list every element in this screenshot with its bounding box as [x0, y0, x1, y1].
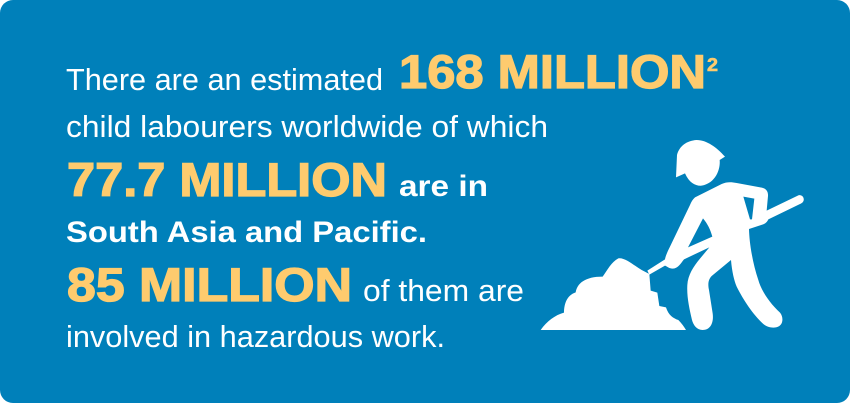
line: are in: are in — [399, 170, 488, 203]
icon: worker with shovel — [541, 140, 804, 330]
stat: 77.7 million: 77.7 MILLION — [67, 153, 387, 206]
footnote marker: 2 — [707, 55, 718, 75]
helmet and head — [676, 140, 725, 186]
line: child labourers: child labourers worldwide of which — [66, 109, 548, 144]
dirt pile — [541, 258, 686, 330]
line: region: South Asia and Pacific. — [66, 216, 427, 249]
body, arms and legs — [647, 182, 804, 330]
line: of them are: of them are — [363, 273, 524, 308]
stat: 85 million: 85 MILLION — [67, 258, 352, 311]
line: estimated intro: There are an estimated — [66, 62, 383, 97]
text block: statistics — [66, 45, 718, 354]
line: hazardous work: involved in hazardous work. — [66, 319, 445, 354]
stat: 168 million: 168 MILLION — [399, 45, 706, 98]
